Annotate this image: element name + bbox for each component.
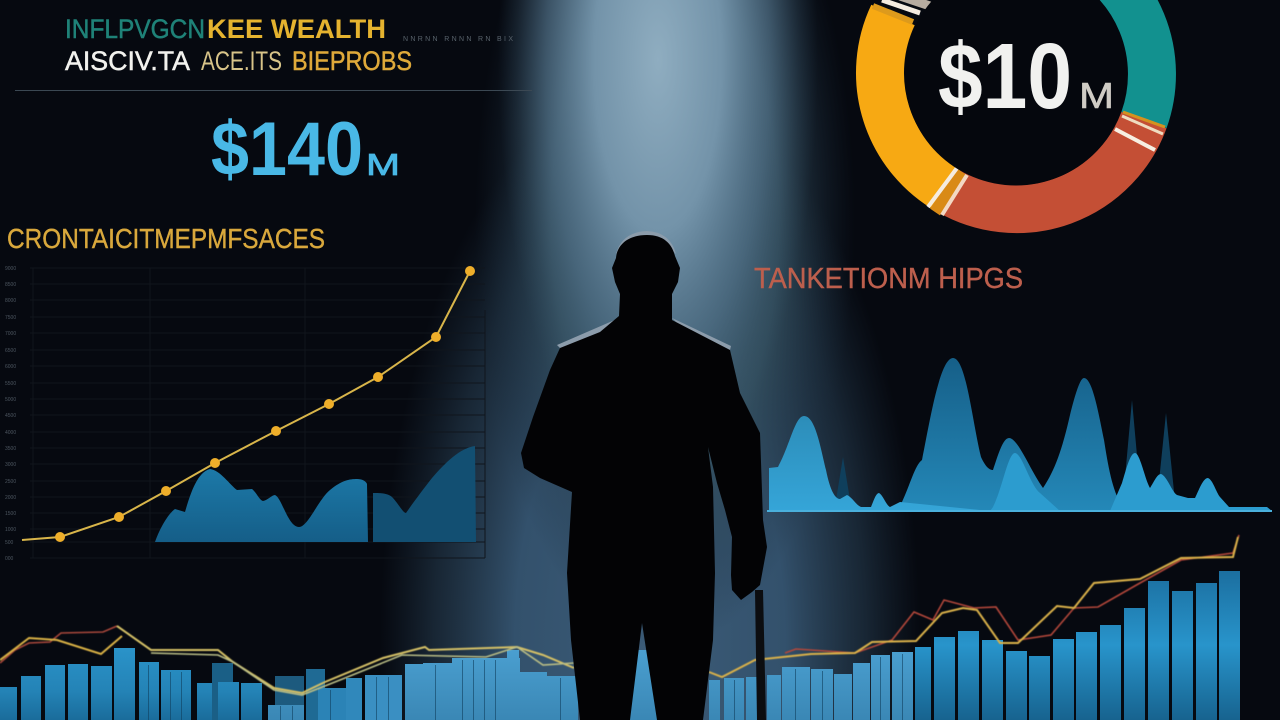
stat: $140M: $140 [211,107,363,192]
stat: $140M: M [366,147,400,182]
heading: influence wealth: BIEPROBS [292,46,412,76]
y-axis tick labels: 8500 [5,282,16,288]
y-axis tick labels: 7000 [5,331,16,337]
y-axis tick labels: 1000 [5,527,16,533]
trend lines: left [0,626,574,695]
bar chart: centre bars [268,650,913,720]
y-axis tick labels: 8000 [5,298,16,304]
heading: influence wealth: KEE WEALTH [207,14,386,44]
bar chart: right bars [915,571,1240,720]
left peak and low ripples [769,416,990,511]
y-axis tick labels: 9000 [5,266,16,272]
heading divider [15,90,532,91]
y-axis tick labels: 6500 [5,348,16,354]
baseline [767,510,1272,512]
heading: influence wealth: AISCIV.TA [65,46,190,76]
secondary pale trend left [151,647,574,695]
trend lines: right [709,535,1239,677]
heading: left chart: CRONTAICITMEPMFSACES [7,223,325,254]
heading: right chart: TANKETIONM HIPGS [754,263,1023,295]
y-axis tick labels: 000 [5,556,14,562]
red trend left [0,626,117,663]
y-axis tick labels: 7500 [5,315,16,321]
large peaks [893,358,1122,511]
heading: influence wealth [65,14,412,76]
donut value: $10M: $10 [938,24,1072,128]
red trend right [785,535,1239,653]
segment: teal [1075,0,1152,120]
y-axis tick labels: 4000 [5,430,16,436]
y-axis tick labels: 3000 [5,462,16,468]
y-axis tick labels: 500 [5,540,14,546]
growth line markers [55,266,475,542]
area series [155,469,368,542]
spotlight beam [380,0,920,720]
bar chart: left bars [0,648,262,720]
y-axis tick labels: 1500 [5,511,16,517]
y-axis tick labels: 3500 [5,446,16,452]
y-axis tick labels: 2000 [5,495,16,501]
yellow trend right [709,537,1238,677]
cane [755,590,766,720]
area chart panel [767,358,1272,512]
bar separators [148,654,903,720]
rim light [557,231,731,358]
chart grid [30,268,485,558]
body [521,235,767,720]
heading: influence wealth: INFLPVGCN [65,14,205,44]
donut hole [904,0,1128,186]
y-axis tick labels [5,266,16,562]
segment dividers [873,0,1165,215]
darker area series [373,446,476,542]
ghost spikes [836,400,1176,511]
growth line [22,271,470,540]
light foreground peaks [990,453,1272,511]
line chart panel [5,266,485,562]
y-axis tick labels: 2500 [5,479,16,485]
segment: red [949,120,1144,209]
silhouette of man with cane [521,231,767,720]
small caption: NNRNN RNNN RN BIX [403,36,513,43]
heading: influence wealth: ACE.ITS [201,46,282,76]
donut value: $10M: M [1079,75,1114,116]
main yellow trend left [117,626,574,693]
y-axis tick labels: 4500 [5,413,16,419]
y-axis tick labels: 5000 [5,397,16,403]
short yellow trend left [0,636,122,660]
segment: yellow [880,15,949,191]
y-axis tick labels: 5500 [5,381,16,387]
y-axis tick labels: 6000 [5,364,16,370]
donut chart [873,0,1165,215]
